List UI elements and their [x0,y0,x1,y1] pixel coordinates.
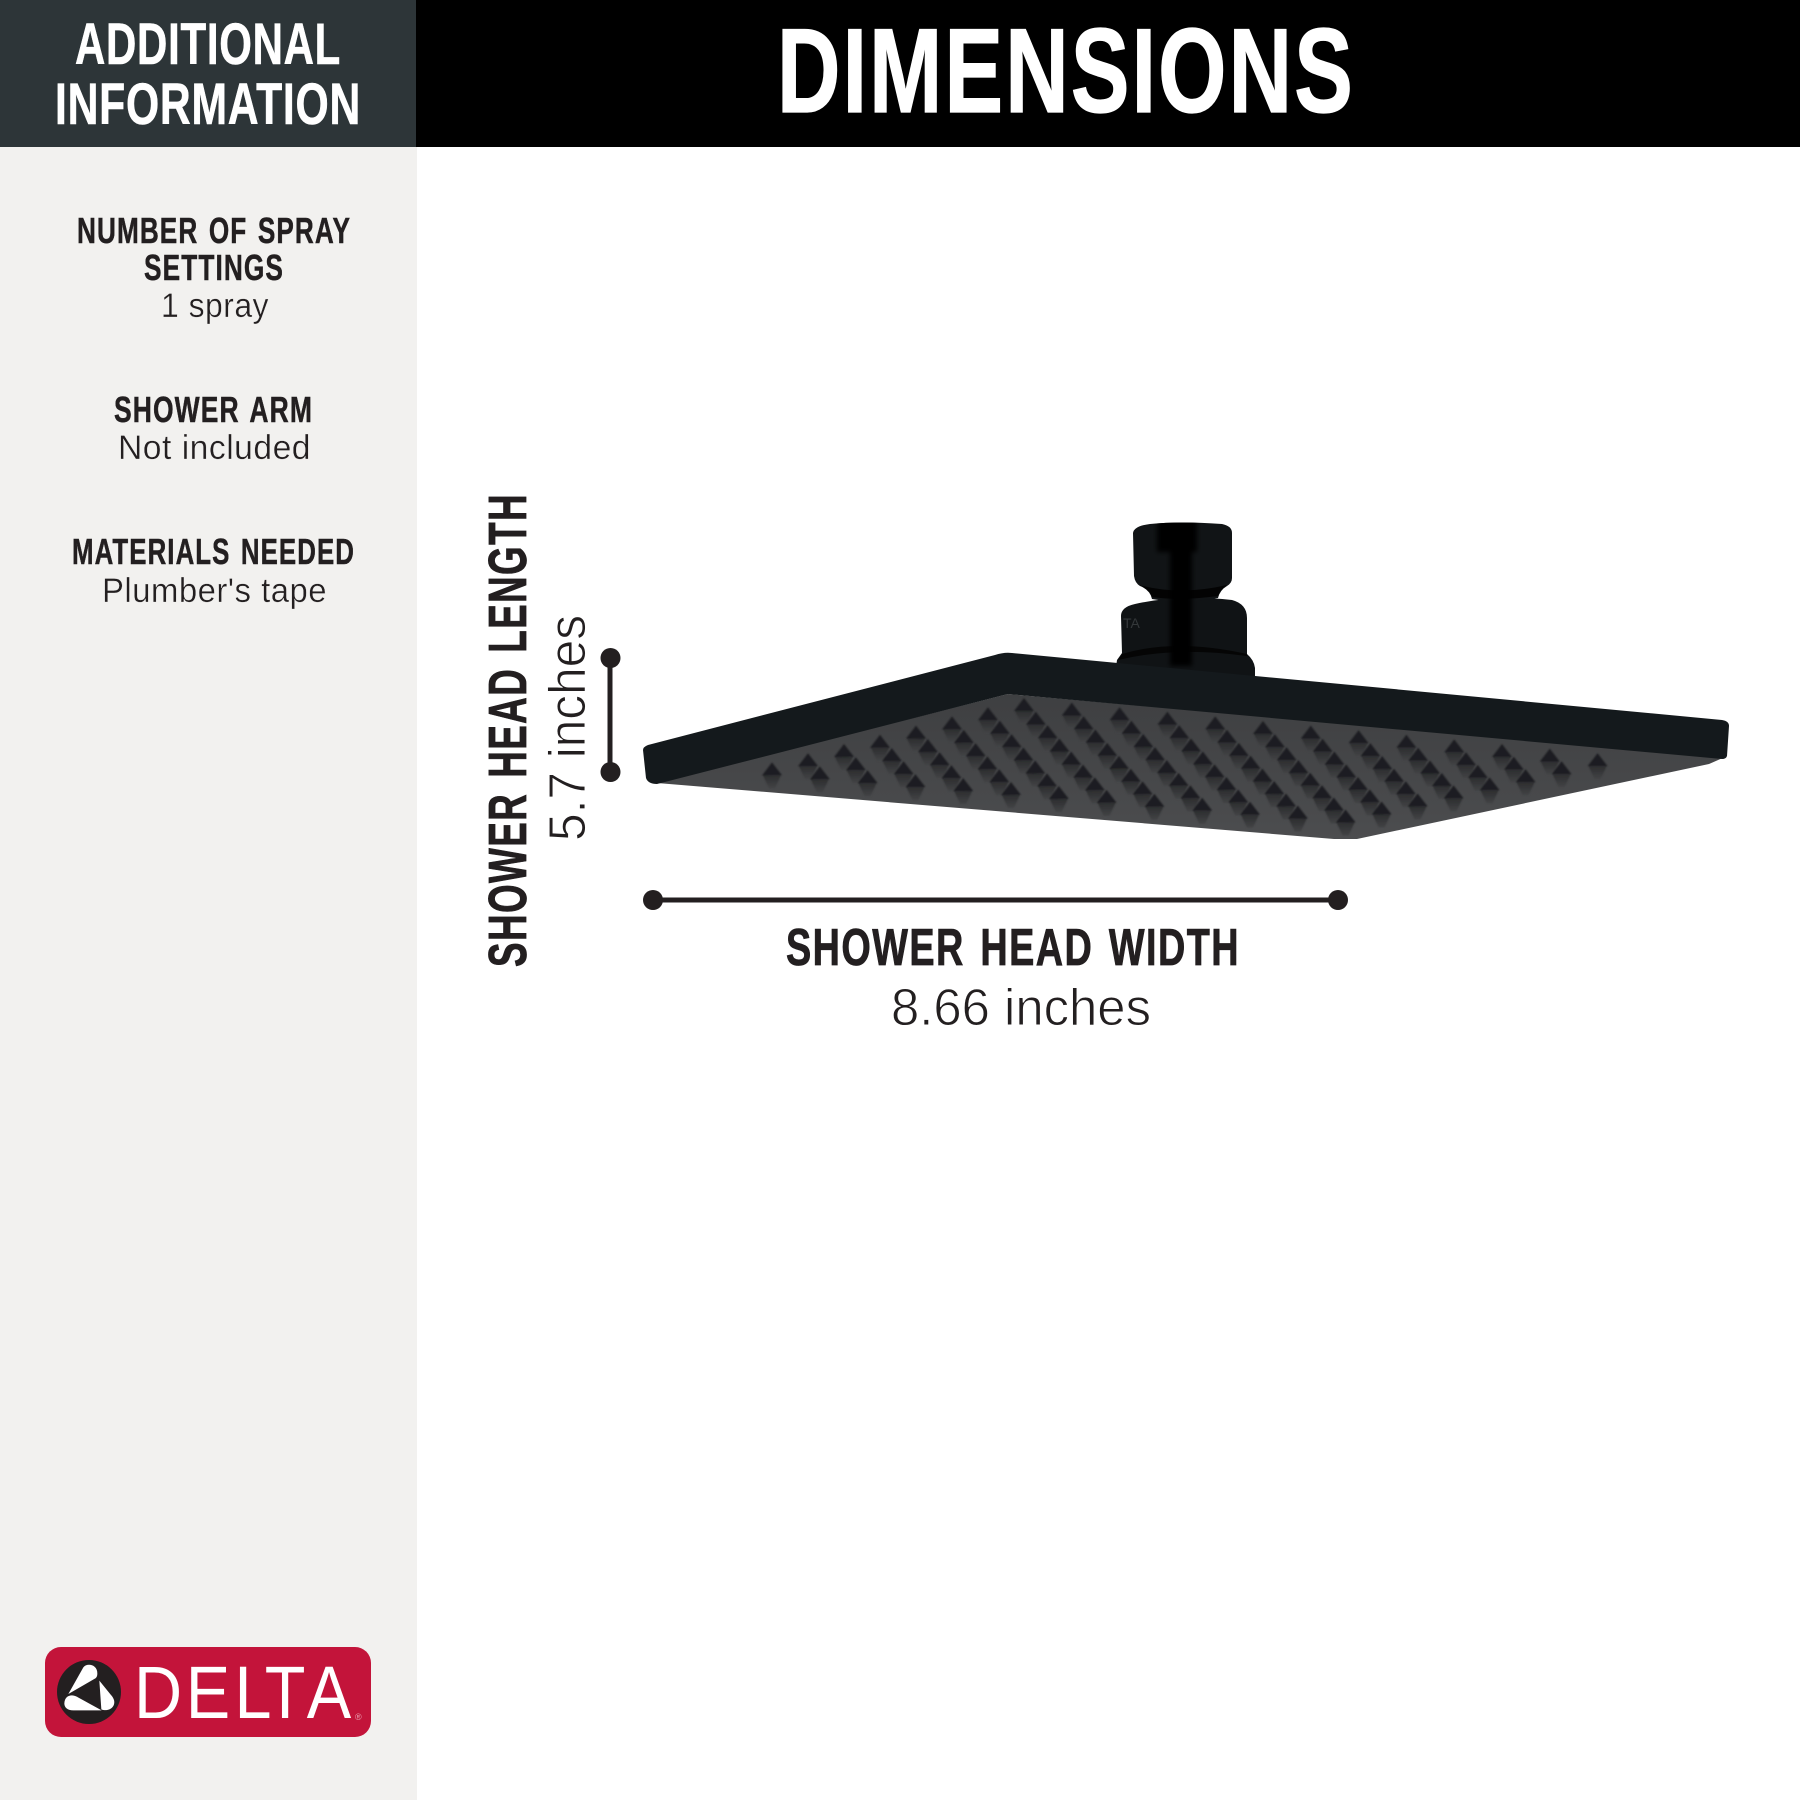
dark reflection band [1157,518,1197,666]
dimension: shower head length [478,493,620,967]
heading: additional information: INFORMATION [55,72,361,137]
shower arm connector [1114,518,1255,682]
text block: materials needed: Plumber's tape [102,572,327,610]
value: 8.66 inches: 8.66 inches [891,979,1151,1037]
text block: number of spray settings: SETTINGS [144,247,284,288]
registered mark: ® [355,1712,362,1722]
heading: additional information: ADDITIONAL [75,12,341,77]
text block: shower arm: Not included [118,429,311,467]
text block: shower arm: SHOWER ARM [114,389,313,430]
dimension: shower head width [643,890,1348,1037]
engraved text on collar: TA [1123,615,1141,631]
logo: Delta [45,1647,371,1737]
panel: additional information sidebar [0,0,417,1800]
upper swivel cylinder [1133,522,1232,601]
label: shower head width: SHOWER HEAD WIDTH [786,919,1240,977]
sidebar header [0,0,416,147]
icon: Delta circle emblem [57,1660,121,1724]
text block: number of spray settings: 1 spray [161,287,269,325]
text block: shower arm [114,389,313,467]
illustration: black rain shower head [643,518,1729,844]
shower head underside with nozzles [657,694,1725,844]
text block: materials needed [72,531,355,610]
wordmark: DELTA: DELTA [134,1651,351,1734]
text block: number of spray settings: NUMBER OF SPRAY [77,210,351,251]
nozzle grid [762,698,1608,844]
label: shower head length: SHOWER HEAD LENGTH [478,493,538,967]
heading: additional information [55,12,361,137]
measure line: width [643,890,1348,910]
lower collar and flange [1114,598,1255,682]
measure line: length [600,648,620,782]
text block: materials needed: MATERIALS NEEDED [72,531,355,572]
value: 5.7 inches: 5.7 inches [539,615,597,841]
banner: dimensions header [416,0,1800,147]
heading: dimensions: DIMENSIONS [777,4,1355,138]
shower head rim [643,653,1729,784]
text block: number of spray settings [77,210,351,325]
collar seam [1118,646,1247,660]
